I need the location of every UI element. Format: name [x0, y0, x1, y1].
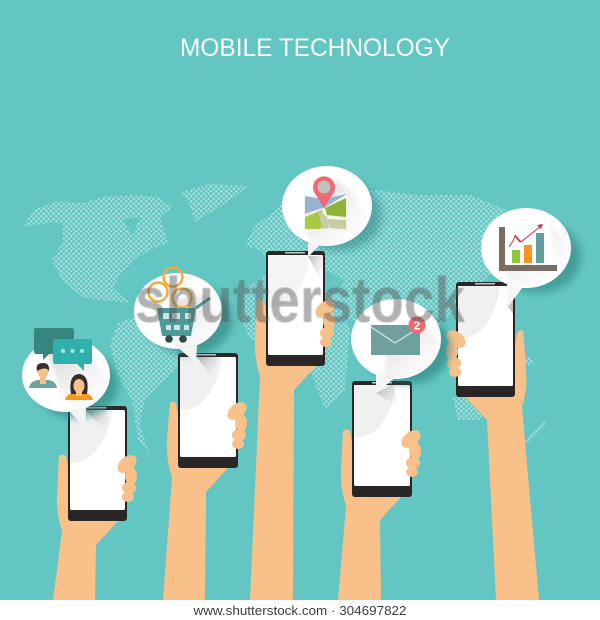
icon: notification badge: 2 [414, 318, 421, 332]
fingers hand 3 [312, 297, 338, 347]
hand 1 arm and palm [53, 454, 118, 600]
icon: woman [65, 374, 93, 400]
bubble 5: bar chart [481, 208, 581, 307]
fingers hand 1 [114, 452, 140, 502]
icon: man [29, 363, 57, 388]
bubble 3: map pin [282, 166, 382, 257]
fingers hand 5 [443, 327, 469, 377]
hand 5 arm and palm [465, 330, 539, 600]
phone 2 [178, 353, 238, 468]
hand 2 arm and palm [163, 402, 228, 600]
watermark: shutterstock [135, 264, 465, 336]
icon: location pin [313, 176, 335, 208]
phone 1 [68, 406, 127, 521]
hand 4 arm and palm [338, 430, 402, 600]
bubble 1: people chat [22, 328, 118, 427]
icon: chat bubbles [34, 328, 92, 371]
hand 3 arm and palm [250, 300, 316, 600]
icon: shopping cart [157, 298, 210, 343]
fingers hand 4 [398, 427, 424, 477]
fingers hand 2 [224, 399, 250, 449]
bubble 4: mail [351, 299, 451, 393]
phone 5 [456, 282, 515, 397]
phone 4 [352, 381, 412, 497]
phone 3 [266, 251, 325, 366]
icon: envelope [371, 325, 420, 355]
footer credit: www.shutterstock.com · 304697822 [192, 603, 406, 618]
hudson bay cutout [122, 217, 140, 235]
icon: bar chart [499, 224, 557, 271]
dotted world map [23, 184, 547, 455]
icon: coins [148, 268, 192, 308]
bubble 2: shopping cart [134, 268, 232, 363]
icon: folded map [304, 192, 348, 231]
title: MOBILE TECHNOLOGY [180, 34, 450, 62]
